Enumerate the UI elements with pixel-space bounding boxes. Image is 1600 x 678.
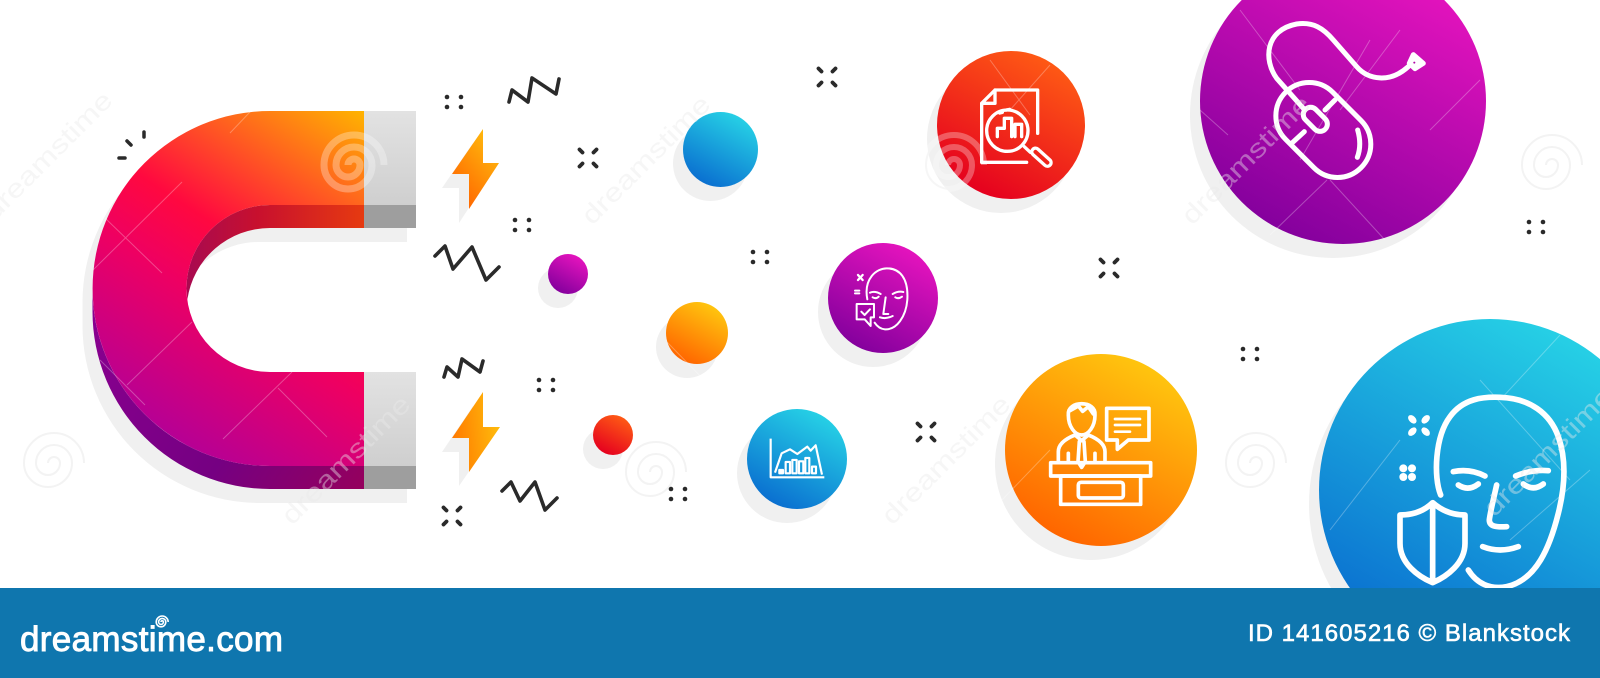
watermark text: dreamstime (1175, 89, 1316, 230)
icon: document with magnifier (982, 90, 1053, 168)
zigzag sparks (435, 78, 559, 510)
magnet outer depth (92, 288, 364, 489)
icon: chart (771, 439, 824, 477)
bottom lightning bolt (442, 392, 500, 486)
red circle: report analysis icon (927, 51, 1085, 213)
footer bar (0, 588, 1600, 678)
icon: face with shield (1399, 397, 1564, 587)
icon: face with checkmark bubble (855, 268, 907, 329)
scattered dot marks (444, 68, 1545, 524)
image id and credit: ID 141605216 © Blankstock (1248, 620, 1571, 647)
purple circle: face check icon (818, 243, 938, 367)
watermark text: dreamstime (575, 89, 716, 230)
bottom steel tip (364, 372, 416, 489)
red dot (583, 415, 633, 469)
logo text: dreamstime.com (20, 620, 283, 659)
watermark lines (93, 10, 1590, 540)
logo spiral (156, 616, 168, 627)
watermark text: dreamstime (275, 389, 416, 530)
watermark spiral over magnet (324, 135, 384, 189)
large blue circle: face shield icon (1309, 319, 1600, 675)
magnet shadow (82, 125, 407, 503)
watermark spirals on background (24, 135, 1582, 496)
large purple circle: computer mouse icon (1190, 0, 1486, 258)
horseshoe magnet (82, 111, 416, 503)
top lightning bolt (442, 129, 499, 223)
watermark text: dreamstime (875, 389, 1016, 530)
purple dot (538, 254, 588, 308)
magnet inner depth (186, 205, 364, 300)
icon: clerk at desk with speech bubble (1051, 404, 1151, 504)
icon: computer mouse (1262, 24, 1423, 191)
watermark text: dreamstime (1477, 381, 1600, 522)
orange dot (656, 302, 728, 378)
magnet spark marks (119, 132, 144, 158)
magnet gradient face (93, 111, 364, 466)
watermark spiral over red circle (924, 135, 984, 189)
blue dot (673, 112, 758, 201)
blue circle: line and bar chart icon (737, 409, 847, 523)
orange circle: reception desk icon (995, 354, 1197, 560)
watermark text (0, 85, 1600, 530)
top steel tip (364, 111, 416, 228)
